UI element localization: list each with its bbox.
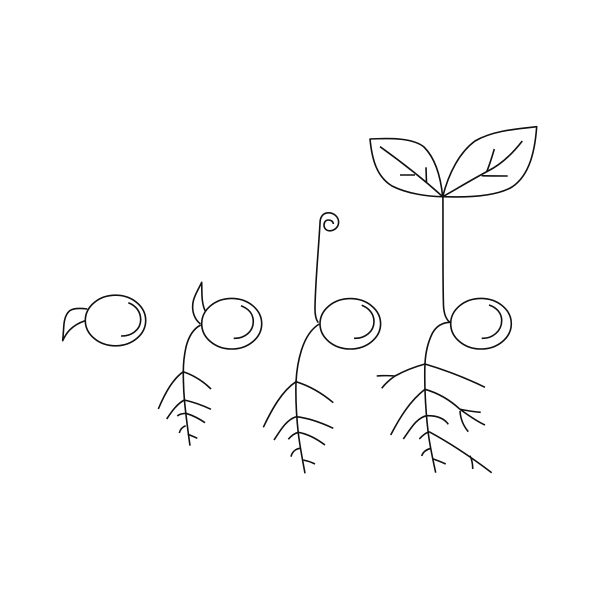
sprout tip [63, 308, 87, 341]
root system 3 [263, 324, 333, 473]
seed 4 highlight [482, 305, 502, 338]
stage 2: seedling with root and leaf bud [158, 282, 262, 446]
right leaf outline [443, 127, 537, 197]
stage 4: young plant with two leaves [370, 127, 537, 473]
main root [296, 324, 319, 473]
seed 1 highlight [121, 303, 141, 336]
seed 3 body [320, 299, 381, 349]
left leaf veins [380, 147, 443, 197]
root branches [158, 372, 211, 438]
leaf bud [193, 282, 205, 324]
left leaf [370, 139, 443, 197]
right leaf [443, 127, 537, 197]
root system 2 [158, 325, 211, 446]
root branches [377, 364, 492, 473]
root branches [263, 382, 333, 464]
seed 3 highlight [354, 305, 374, 338]
root system 4 [377, 322, 492, 473]
right leaf veins [443, 141, 522, 197]
seed 1 body [85, 295, 146, 346]
seed 2 highlight [234, 306, 253, 338]
curled shoot [315, 213, 339, 323]
left leaf outline [370, 139, 443, 197]
seed 2 body [202, 298, 262, 349]
stem [443, 197, 450, 322]
stage 3: seedling with curled shoot [263, 213, 381, 473]
seed 4 body [451, 298, 511, 349]
main root [425, 322, 450, 473]
main root [183, 325, 201, 446]
stage 1: seed with emerging sprout [63, 295, 146, 346]
